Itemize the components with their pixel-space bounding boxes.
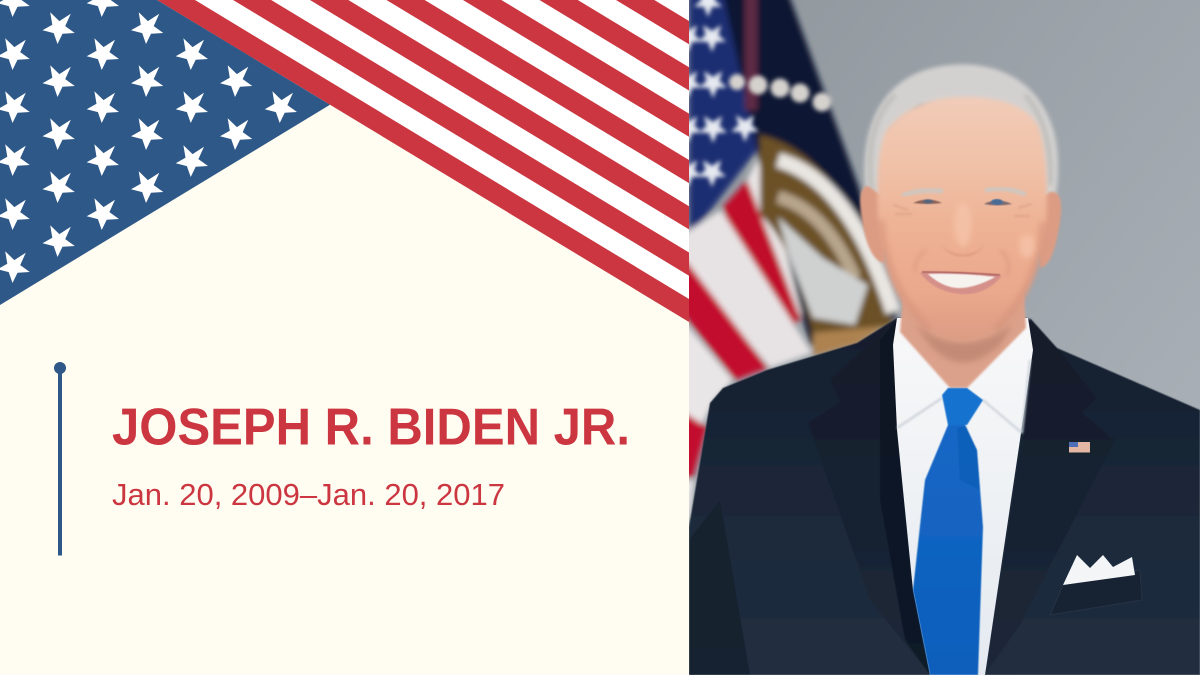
- suit jacket: [689, 318, 1200, 675]
- eye wrinkles: [893, 204, 1032, 216]
- panel: cream title background: [0, 0, 689, 675]
- face: [878, 97, 1047, 341]
- flag lapel pin: [1069, 442, 1090, 452]
- jaw shading: [881, 220, 1043, 330]
- eyes: [913, 199, 1012, 206]
- flag corner: white stripes and red stripes: [157, 0, 689, 322]
- panel: portrait photo: [674, 0, 1200, 675]
- jacket pocket: [1050, 570, 1142, 615]
- blurred flags behind portrait: [680, 0, 897, 520]
- accent: vertical line with dot: [54, 362, 66, 556]
- shirt: [893, 318, 1033, 675]
- ears: [860, 186, 1061, 268]
- flag stars: [689, 0, 760, 188]
- hair: [864, 64, 1058, 210]
- fringe beads: [729, 74, 832, 112]
- wall background: [689, 0, 1200, 675]
- collar shadows: [897, 360, 1030, 433]
- flag corner: blue star field: [0, 0, 330, 305]
- pocket square: [1063, 555, 1135, 585]
- mouth: [920, 272, 1002, 294]
- subtitle: dates in office: Jan. 20, 2009–Jan. 20, 2017: [112, 478, 505, 512]
- jacket left lapel: [808, 318, 930, 675]
- neck: [900, 295, 1026, 388]
- hair side shade: [870, 95, 1050, 190]
- nose shading: [948, 250, 978, 256]
- head: [860, 64, 1061, 341]
- cheek highlight: [954, 203, 1035, 258]
- eyebrows: [904, 189, 1024, 195]
- smile lines: [915, 250, 1009, 276]
- title: JOSEPH R. BIDEN JR.: [112, 398, 630, 456]
- jacket right lapel: [1006, 318, 1112, 550]
- necktie: [913, 388, 983, 675]
- chin shadow: [920, 328, 1008, 364]
